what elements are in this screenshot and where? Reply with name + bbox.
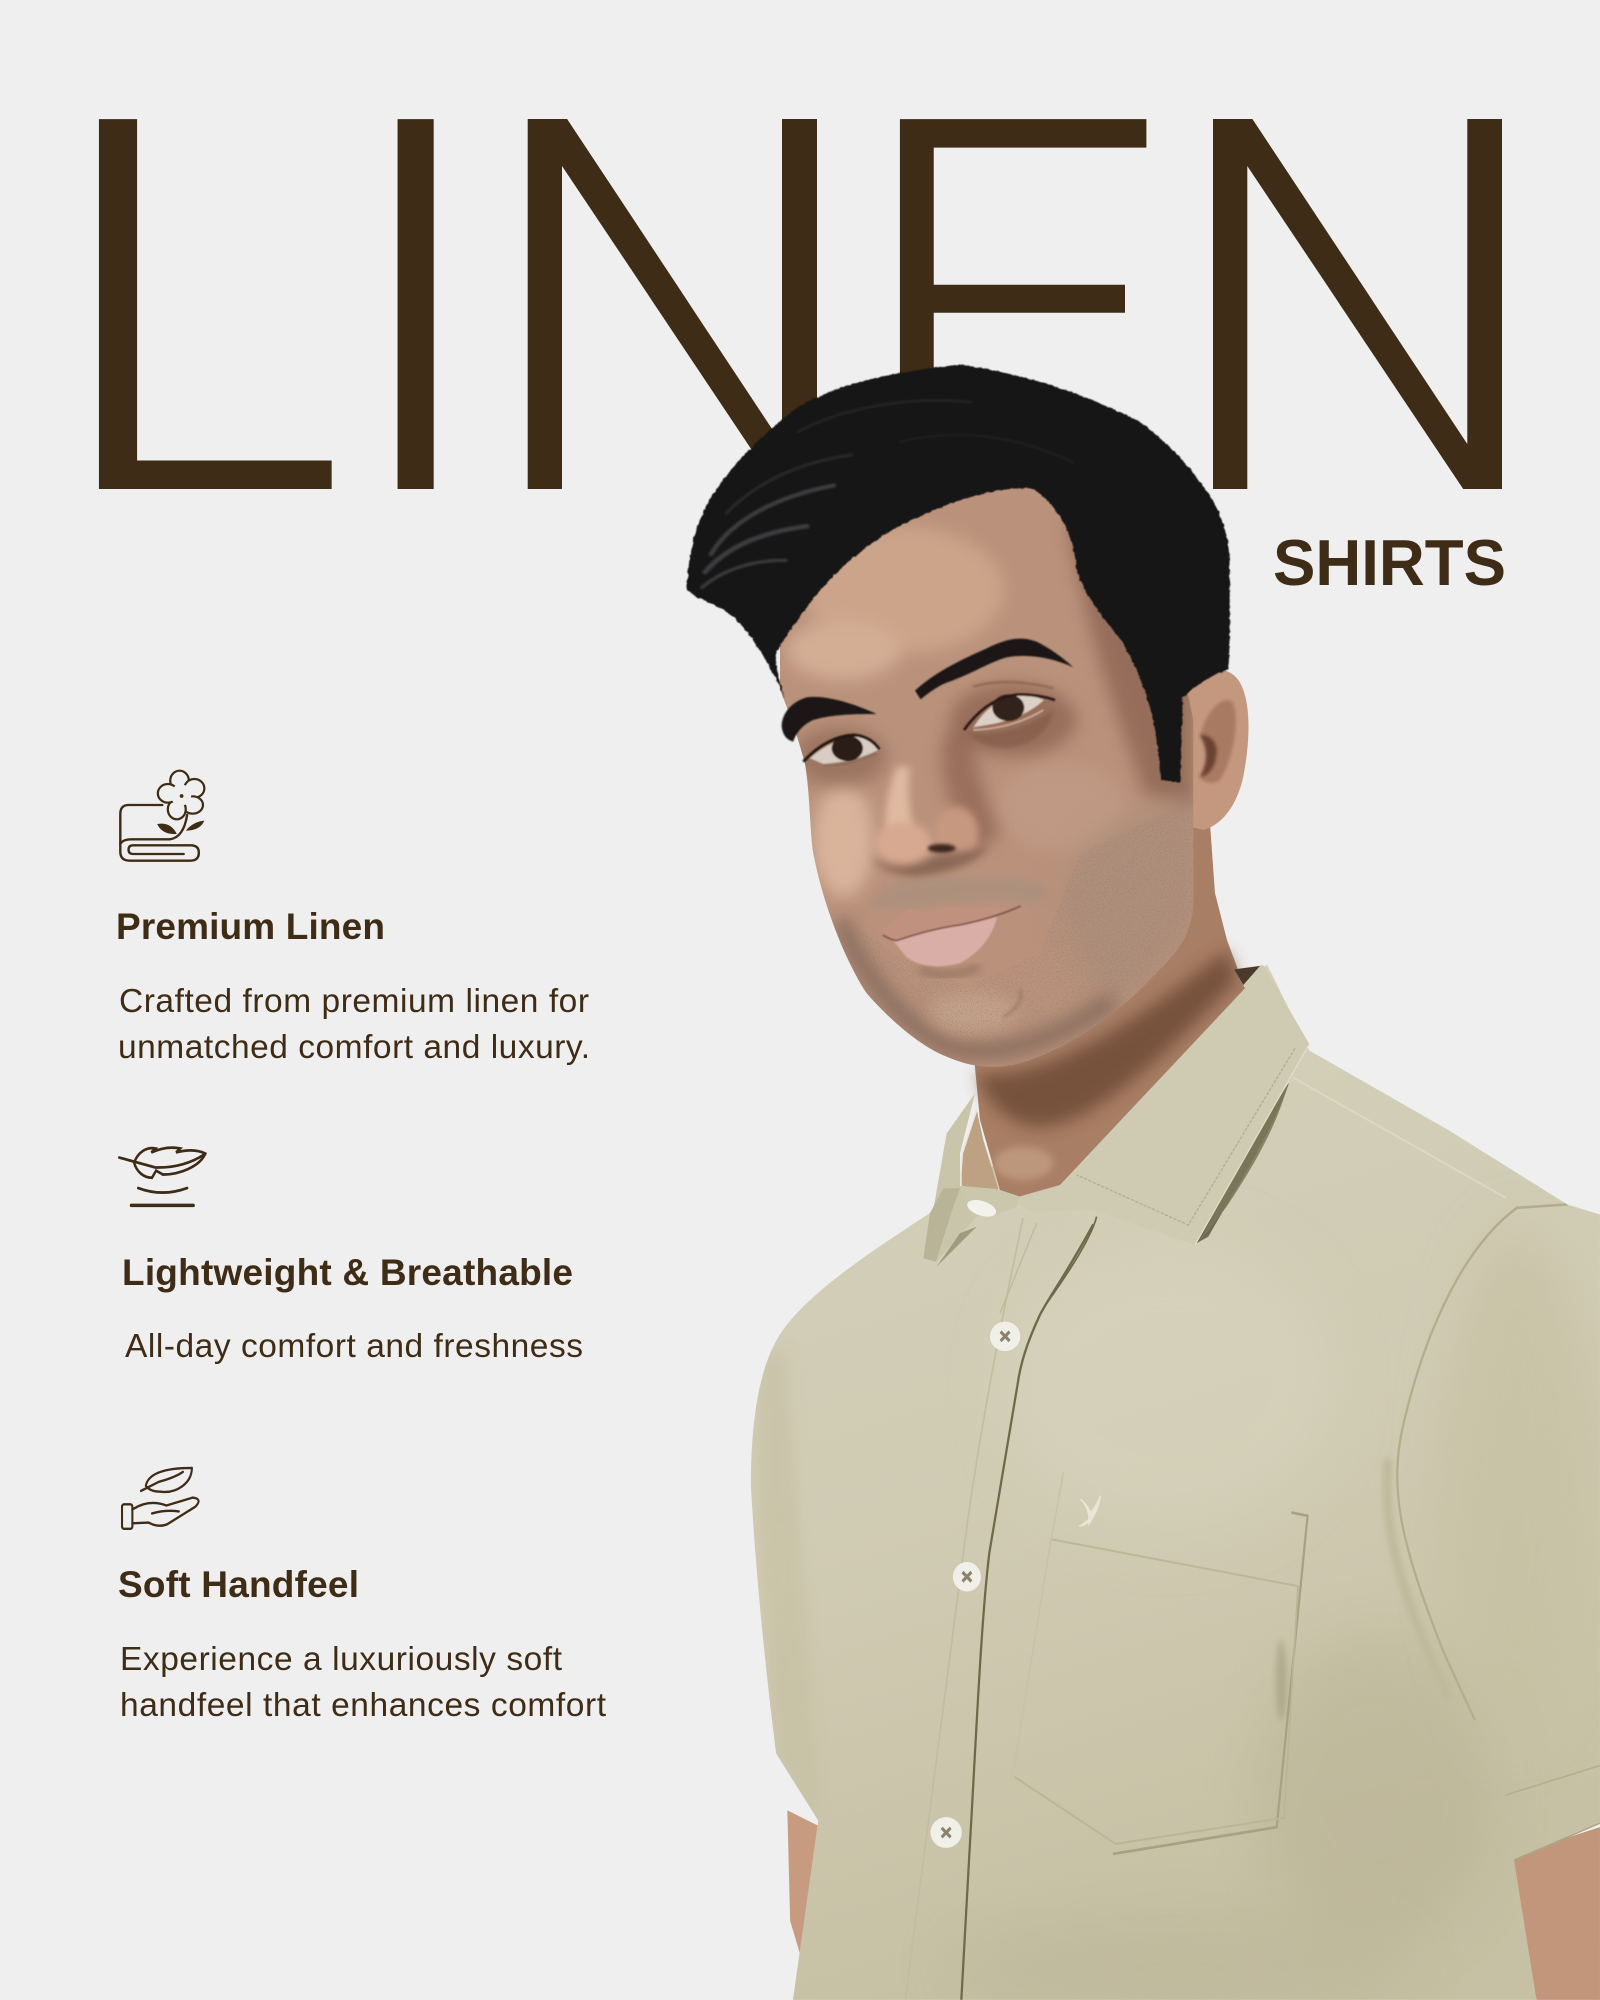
shirt logo bbox=[1079, 1496, 1100, 1526]
description: handfeel that enhances comfort bbox=[120, 1687, 607, 1724]
title: LINEN: I bbox=[342, 0, 489, 615]
heading: SHIRTS: SHIRTS bbox=[1273, 526, 1506, 599]
sleeve hem bbox=[1506, 1766, 1600, 1795]
cheek stubble bbox=[1066, 810, 1190, 990]
title: LINEN: N bbox=[478, 0, 867, 615]
right arm skin bbox=[1506, 1827, 1600, 2000]
stubble speckle bbox=[840, 800, 1193, 1068]
heading: Soft Handfeel bbox=[118, 1564, 359, 1605]
left arm skin bbox=[787, 1810, 821, 1968]
title: LINEN: E bbox=[853, 0, 1184, 614]
right temple shadow bbox=[1067, 520, 1193, 807]
cheek light bbox=[1014, 778, 1105, 834]
nose bridge highlight bbox=[882, 764, 914, 828]
icon: leaf in hand bbox=[122, 1468, 199, 1529]
buttons bbox=[930, 1322, 1020, 1848]
feature: Soft Handfeel bbox=[118, 1468, 607, 1724]
mouth bbox=[882, 906, 1021, 966]
right collar leaf bbox=[1020, 965, 1309, 1245]
shirt body bbox=[751, 965, 1600, 2000]
neck bbox=[973, 800, 1245, 1198]
heading: Premium Linen bbox=[116, 906, 385, 947]
feature: Premium Linen bbox=[116, 771, 590, 1066]
nose underside bbox=[872, 847, 987, 877]
head bbox=[780, 480, 1248, 1068]
icon: feather bbox=[119, 1148, 205, 1205]
nose side shadow bbox=[941, 730, 1000, 853]
feature: Lightweight and Breathable bbox=[119, 1148, 583, 1365]
model photo illustration bbox=[687, 364, 1600, 2000]
icon: towel and flower bbox=[120, 771, 204, 861]
collar shadow bbox=[1193, 1083, 1289, 1245]
shoulder seam bbox=[1292, 1077, 1506, 1198]
sleeve seam bbox=[1397, 1204, 1567, 1720]
description: Crafted from premium linen for bbox=[119, 983, 589, 1020]
forehead light bbox=[803, 527, 1003, 653]
eyebrows bbox=[782, 639, 1073, 742]
pocket bbox=[1012, 1472, 1308, 1854]
moustache stubble bbox=[872, 878, 1044, 909]
ear bbox=[1177, 670, 1248, 830]
title: LINEN: N bbox=[1164, 0, 1552, 615]
chin bbox=[930, 992, 1017, 1032]
left eye bbox=[803, 735, 879, 765]
collar button bbox=[965, 1197, 998, 1220]
title: LINEN bbox=[46, 0, 1552, 615]
placket collar stitch bbox=[1047, 1217, 1097, 1303]
neck and collar bbox=[923, 800, 1309, 1313]
description: All-day comfort and freshness bbox=[125, 1328, 583, 1365]
description: unmatched comfort and luxury. bbox=[118, 1029, 590, 1066]
heading: Lightweight & Breathable bbox=[122, 1252, 573, 1293]
inner collar band bbox=[962, 1110, 998, 1189]
description: Experience a luxuriously soft bbox=[120, 1641, 563, 1678]
shirt and torso bbox=[751, 965, 1600, 2000]
jaw stubble bbox=[840, 920, 1113, 1052]
right eye bbox=[964, 682, 1055, 730]
eye sockets bbox=[950, 683, 1077, 757]
hair bbox=[687, 364, 1230, 783]
face bbox=[780, 480, 1193, 1067]
title: LINEN: L bbox=[46, 0, 357, 615]
placket edge bbox=[961, 1225, 1093, 2000]
left collar leaf bbox=[923, 1093, 1020, 1262]
